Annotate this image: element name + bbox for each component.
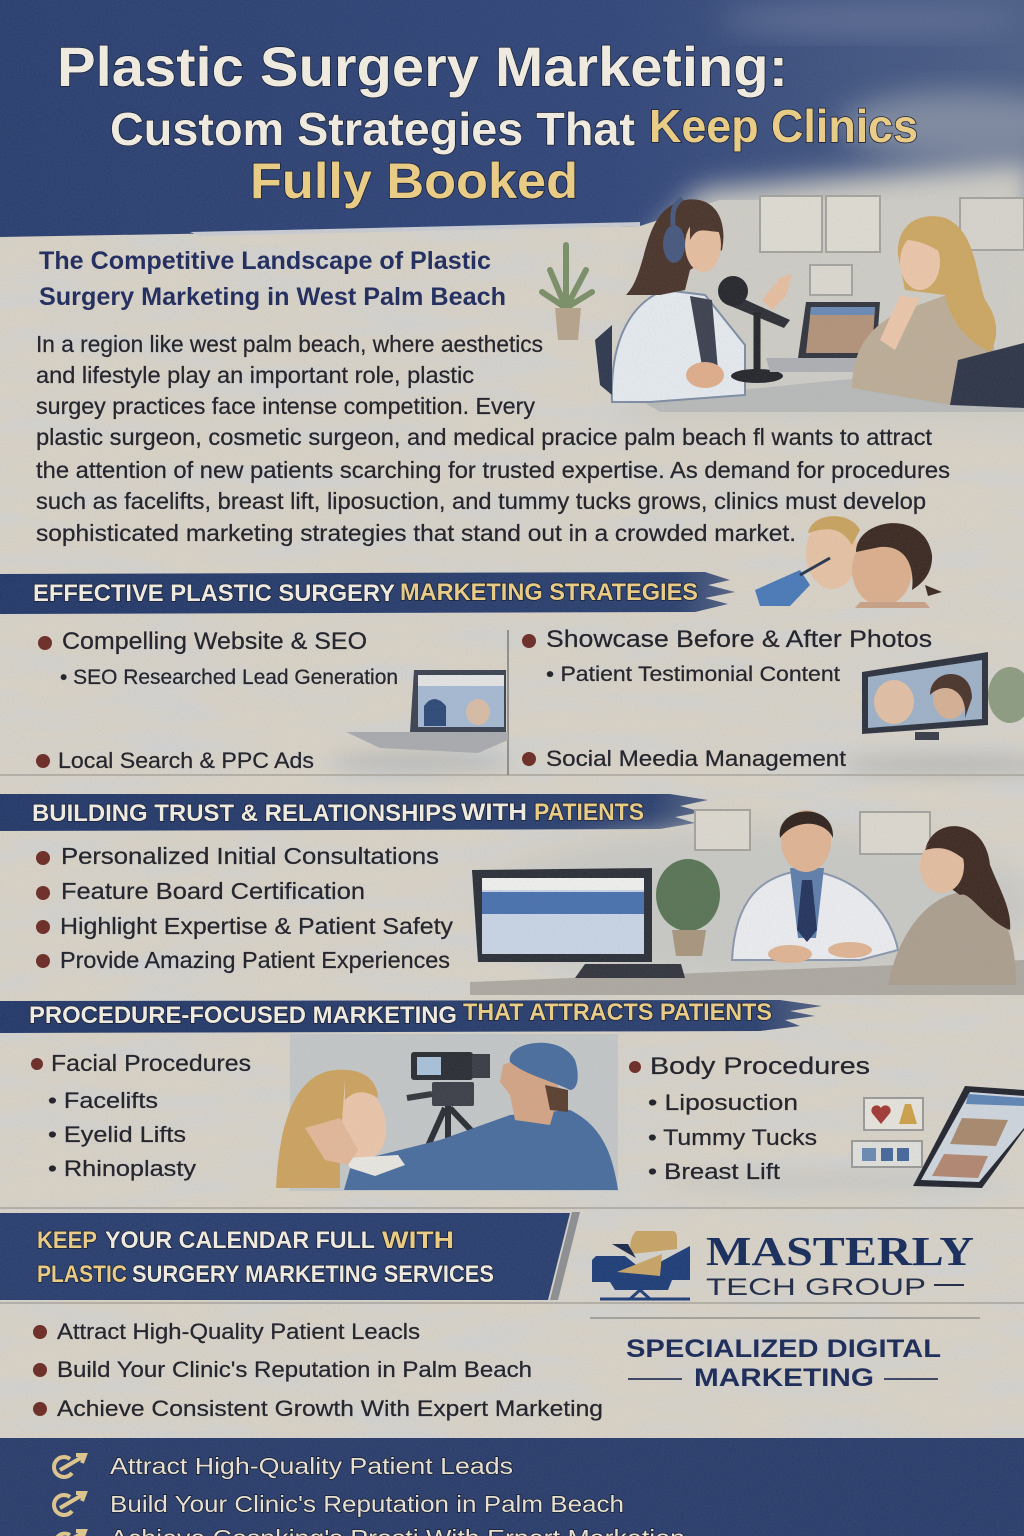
header band — [0, 0, 1024, 237]
icon: potted plant — [542, 245, 592, 340]
icon: social cards — [852, 1098, 923, 1167]
panel: facial procedures — [31, 1050, 251, 1181]
panel heading: The Competitive Landscape of Plastic — [39, 247, 491, 275]
panel: trust bullets — [36, 843, 454, 973]
band: call to action: PLASTIC — [37, 1261, 127, 1288]
band: procedure focused: PROCEDURE-FOCUSED MARKETING — [29, 1002, 457, 1029]
callout: specialized digital marketing: SPECIALIZED DIGITAL — [626, 1335, 941, 1363]
body text: plastic surgeon, cosmetic surgeon, and medical pracice palm beach fl wants to attract — [36, 424, 933, 450]
bullet: body: Body Procedures — [650, 1053, 870, 1080]
band: effective strategies: MARKETING STRATEGIES — [400, 579, 698, 606]
title: Keep Clinics — [649, 100, 918, 152]
panel: body procedures — [629, 1053, 1024, 1188]
check item: leads: Attract High-Quality Patient Leads — [110, 1453, 513, 1479]
illustration: consultation scene — [470, 810, 1024, 995]
band: call to action: SURGERY MARKETING SERVICES — [132, 1261, 494, 1288]
doctor — [732, 810, 898, 963]
illustration: laptop on desk — [766, 302, 880, 372]
band: effective strategies: EFFECTIVE PLASTIC SURGERY — [33, 580, 395, 607]
body text: surgey practices face intense competition. Every — [36, 393, 535, 419]
footer band — [0, 1438, 1024, 1536]
body text: and lifestyle play an important role, plastic — [36, 362, 474, 388]
band: call to action: KEEP — [37, 1227, 97, 1254]
panel heading — [39, 247, 506, 311]
bullet: growth: Achieve Consistent Growth With Expert Marketing — [57, 1396, 603, 1421]
panel: left strategies — [0, 616, 508, 775]
bullet: leads: Attract High-Quality Patient Leacls — [57, 1319, 420, 1344]
band: building trust: PATIENTS — [534, 799, 644, 826]
patient — [276, 1070, 386, 1188]
panel heading: Surgery Marketing in West Palm Beach — [39, 283, 506, 311]
sub-bullet: testimonials: • Patient Testimonial Content — [546, 663, 840, 686]
list: body items: • Tummy Tucks — [648, 1125, 817, 1150]
bullet: expertise: Highlight Expertise & Patient Safety — [60, 913, 454, 939]
plant — [656, 859, 720, 956]
monitor — [472, 868, 685, 978]
band: building trust — [0, 794, 708, 831]
icon: laptop — [346, 670, 508, 753]
check item: reputation: Build Your Clinic's Reputation in Palm Beach — [110, 1491, 624, 1517]
list: facial items: • Facelifts — [48, 1088, 158, 1113]
body text: In a region like west palm beach, where aesthetics — [36, 331, 543, 357]
bullet: social media: Social Meedia Management — [546, 746, 846, 771]
icon: monitor with faces — [862, 652, 1024, 740]
bullet: reputation: Build Your Clinic's Reputation in Palm Beach — [57, 1357, 532, 1382]
sub-bullet: lead generation: • SEO Researched Lead Generation — [60, 666, 398, 689]
list: facial items — [48, 1088, 196, 1181]
list: body items: • Breast Lift — [648, 1159, 780, 1184]
callout: specialized digital marketing: MARKETING — [694, 1364, 874, 1392]
list: facial items: • Rhinoplasty — [48, 1156, 196, 1181]
logo: Masterly Tech Group — [592, 1228, 974, 1301]
title: Custom Strategies That — [110, 103, 635, 155]
panel: right strategies — [522, 626, 1024, 771]
patient — [888, 826, 1016, 985]
band: effective strategies — [0, 572, 735, 614]
bullet: website and SEO: Compelling Website & SEO — [62, 628, 367, 655]
illustration: filming a patient — [276, 1034, 618, 1191]
list: body items — [648, 1090, 817, 1184]
band: procedure focused — [0, 999, 822, 1033]
surgeon — [305, 1043, 618, 1190]
icon: phone — [913, 1086, 1024, 1188]
body text: sophisticated marketing strategies that stand out in a crowded market. — [36, 520, 796, 546]
illustration: doctor with headset at microphone — [595, 198, 792, 402]
bullet: certification: Feature Board Certification — [61, 878, 365, 904]
title: Fully Booked — [250, 153, 578, 209]
callout: specialized digital marketing — [590, 1318, 980, 1392]
camera on tripod — [407, 1052, 490, 1160]
bullet: local search: Local Search & PPC Ads — [58, 748, 314, 773]
band: call to action: WITH — [382, 1227, 454, 1254]
bullet: facial: Facial Procedures — [51, 1050, 251, 1076]
bullet: consultations: Personalized Initial Consultations — [61, 843, 439, 869]
band: building trust: WITH — [461, 799, 527, 826]
band: call to action — [0, 1212, 580, 1300]
band: call to action: YOUR CALENDAR FULL — [105, 1227, 375, 1254]
panel: benefits list — [33, 1319, 603, 1421]
body text: the attention of new patients scarching for trusted expertise. As demand for procedures — [36, 457, 950, 483]
body text: such as facelifts, breast lift, liposuction, and tummy tucks grows, clinics must develop — [36, 488, 926, 514]
title: Plastic Surgery Marketing: — [57, 35, 788, 98]
panel: office backdrop — [625, 160, 1024, 420]
logo mark — [592, 1231, 690, 1299]
illustration: patient face with consultant — [755, 516, 942, 608]
band: procedure focused: THAT ATTRACTS PATIENTS — [463, 999, 772, 1026]
logo: Masterly Tech Group: MASTERLY — [706, 1228, 974, 1274]
list: facial items: • Eyelid Lifts — [48, 1122, 186, 1147]
title — [57, 35, 918, 209]
list: body items: • Liposuction — [648, 1090, 798, 1115]
band: building trust: BUILDING TRUST & RELATIONSHIPS — [32, 800, 457, 827]
bullet: experiences: Provide Amazing Patient Experiences — [60, 947, 450, 973]
logo: Masterly Tech Group: TECH GROUP — [706, 1274, 926, 1301]
bullet: before and after: Showcase Before & After Photos — [546, 626, 932, 653]
illustration: blonde client — [852, 216, 1024, 408]
panel: competitive landscape — [36, 247, 950, 546]
body text — [36, 331, 950, 546]
